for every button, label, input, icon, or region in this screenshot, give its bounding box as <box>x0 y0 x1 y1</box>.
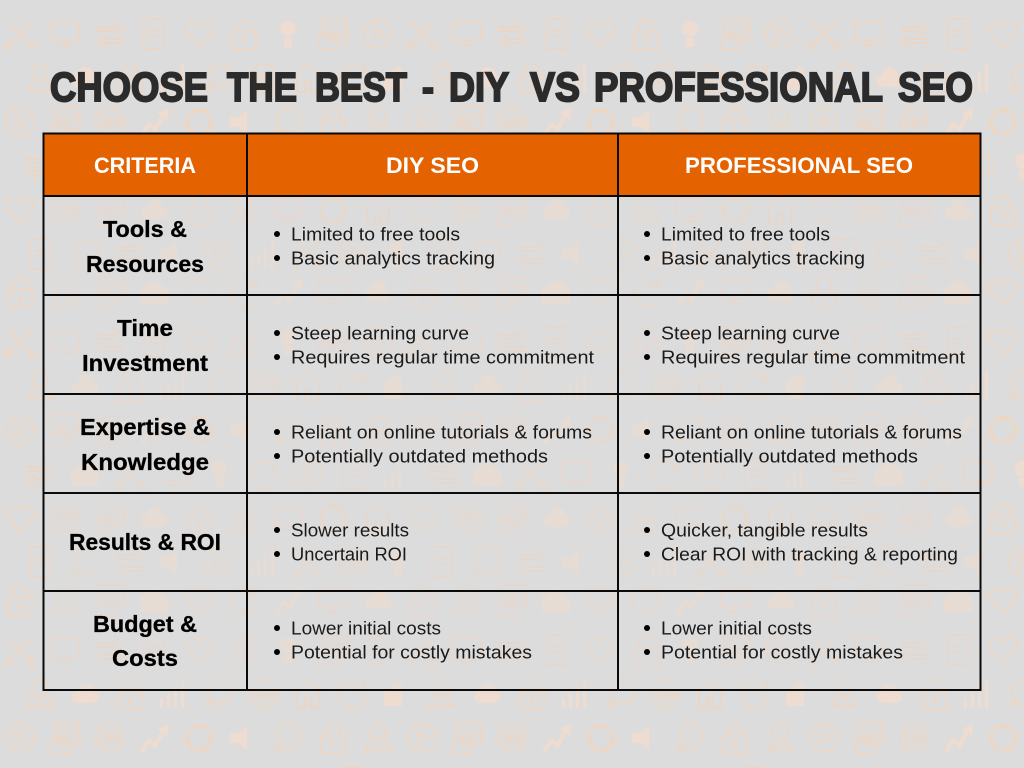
row: budget and costs <box>93 611 903 671</box>
row: budget and costs: Potential for costly mistakes <box>291 642 532 662</box>
row: tools and resources <box>86 216 865 277</box>
row: expertise and knowledge: Reliant on online tutorials & forums <box>291 422 592 442</box>
row: results and ROI <box>69 520 958 564</box>
header: DIY SEO: DIY SEO <box>386 153 479 178</box>
row: time investment: Investment <box>82 350 208 376</box>
row: expertise and knowledge: Potentially outdated methods <box>291 446 548 466</box>
title: CHOOSE <box>50 64 208 110</box>
row: budget and costs: Lower initial costs <box>291 618 441 638</box>
row: tools and resources: Basic analytics tracking <box>291 248 495 268</box>
row: tools and resources: Resources <box>86 251 204 277</box>
row: expertise and knowledge <box>80 414 962 475</box>
row: time investment: Steep learning curve <box>291 324 469 344</box>
comparison table <box>44 134 980 690</box>
row: results and ROI: Slower results <box>291 520 409 540</box>
row: expertise and knowledge: Knowledge <box>81 449 209 475</box>
title: VS <box>530 64 580 110</box>
row: time investment: Time <box>117 315 173 341</box>
title: BEST <box>315 64 407 110</box>
row: tools and resources: Tools & <box>103 216 187 242</box>
row: results and ROI: Quicker, tangible results <box>661 520 868 540</box>
row: expertise and knowledge: Expertise & <box>80 414 210 440</box>
row: results and ROI: Clear ROI with tracking & reporting <box>661 544 958 564</box>
row: tools and resources: Limited to free tools <box>291 224 460 244</box>
row: expertise and knowledge: Potentially outdated methods <box>661 446 918 466</box>
row: time investment: Requires regular time commitment <box>291 348 594 368</box>
header row <box>44 134 980 196</box>
title: THE <box>227 64 297 110</box>
title: DIY <box>449 64 509 110</box>
header: criteria: CRITERIA <box>94 153 196 178</box>
title: - <box>422 64 434 110</box>
row: budget and costs: Potential for costly mistakes <box>661 642 903 662</box>
row: results and ROI: Uncertain ROI <box>291 544 407 564</box>
row: time investment <box>82 315 965 376</box>
row: budget and costs: Lower initial costs <box>661 618 812 638</box>
header: professional SEO: PROFESSIONAL SEO <box>685 153 913 178</box>
row: tools and resources: Basic analytics tracking <box>661 248 865 268</box>
row: budget and costs: Budget & <box>93 611 197 637</box>
title: SEO <box>898 64 973 110</box>
row: time investment: Requires regular time commitment <box>661 348 965 368</box>
title <box>50 64 973 110</box>
row: tools and resources: Limited to free tools <box>661 224 830 244</box>
row: time investment: Steep learning curve <box>661 324 840 344</box>
row: expertise and knowledge: Reliant on online tutorials & forums <box>661 422 962 442</box>
table body backdrop <box>44 196 980 690</box>
title: PROFESSIONAL <box>594 64 883 110</box>
row: budget and costs: Costs <box>112 645 178 671</box>
row: results and ROI: Results & ROI <box>69 529 221 555</box>
